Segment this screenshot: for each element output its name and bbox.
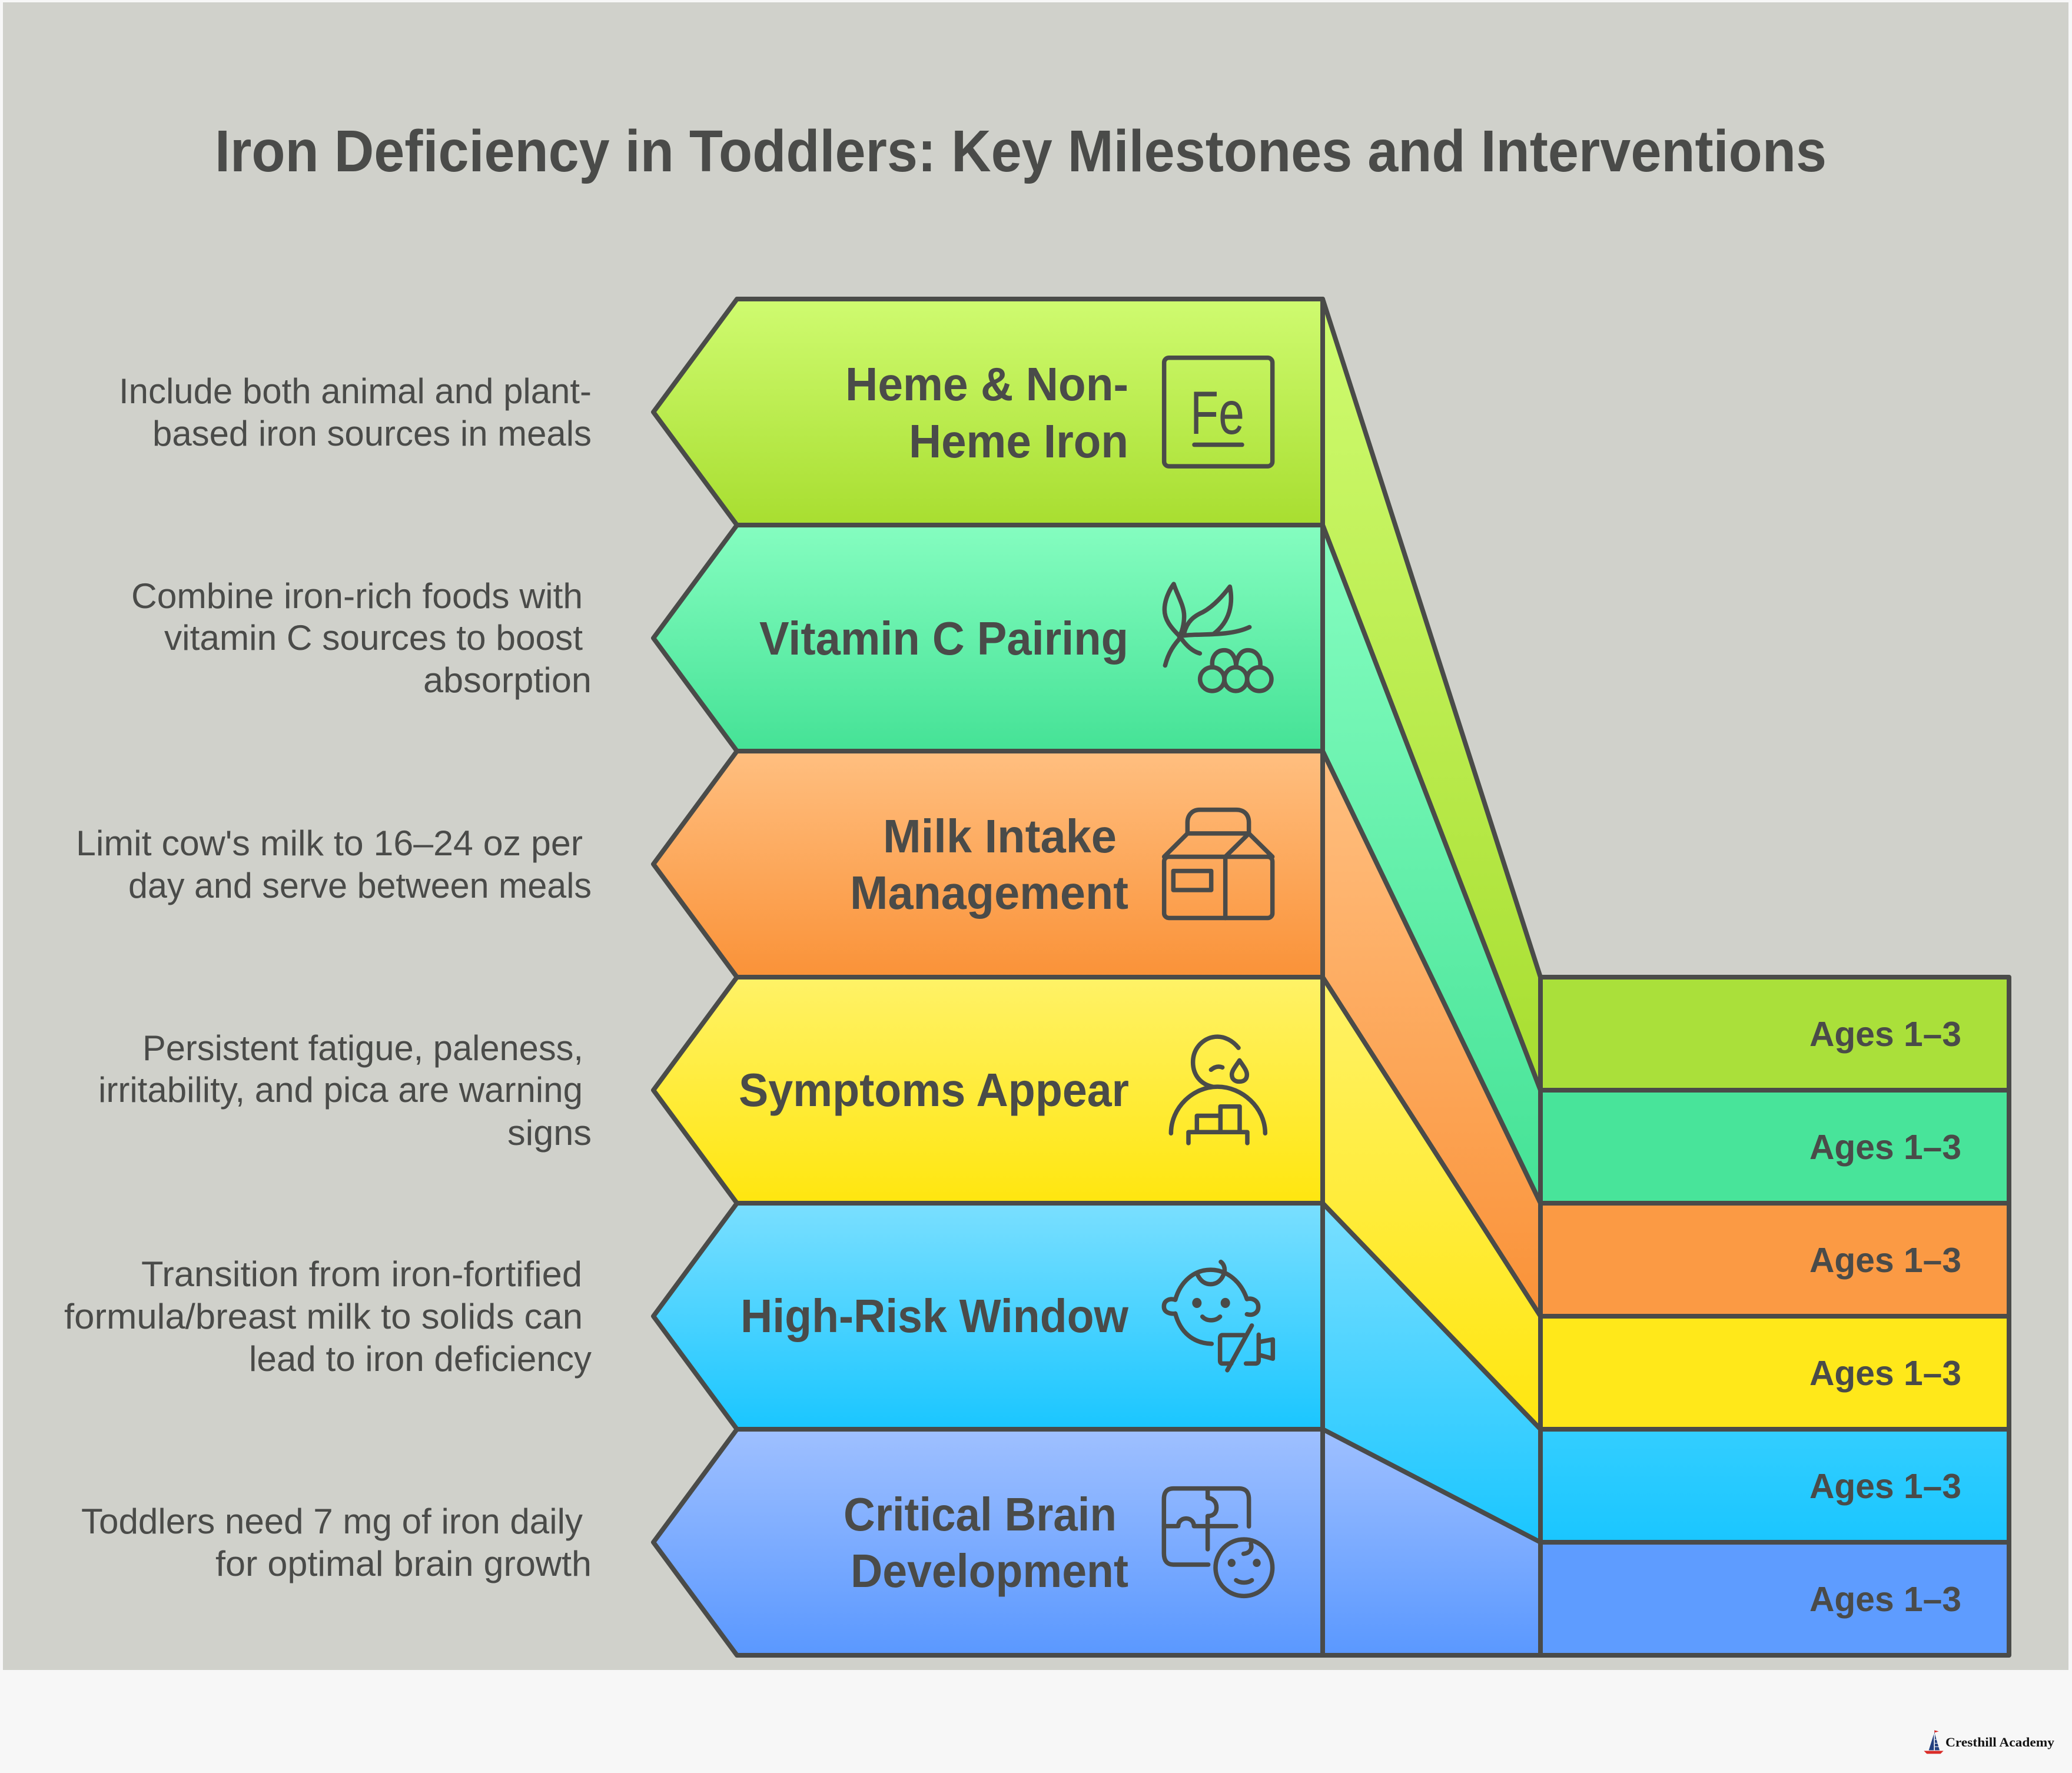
text block: Vitamin C description: [131, 576, 592, 700]
icon: puzzle and baby face: [1164, 1489, 1273, 1596]
panel: age box 6: Ages 1–3: [1809, 1580, 1961, 1619]
panel: age box 3: Ages 1–3: [1809, 1241, 1961, 1280]
heading: High-Risk Window: High-Risk Window: [741, 1290, 1129, 1342]
heading: Critical Brain Development: [844, 1488, 1128, 1597]
text block: Heme description: [119, 371, 592, 453]
text block: Vitamin C description: Combine iron-rich foods with: [131, 576, 583, 616]
heading: Heme and Non-Heme Iron: Heme & Non-: [845, 358, 1128, 410]
text block: High-risk description: [64, 1254, 592, 1379]
text block: Symptoms description: [98, 1028, 592, 1153]
icon: Fe element box: Fe: [1190, 379, 1244, 447]
text block: High-risk description: lead to iron deficiency: [249, 1339, 592, 1379]
icon: Fe element box: [1164, 358, 1273, 466]
text block: Milk description: [76, 824, 592, 905]
panel: age box 5: Ages 1–3: [1809, 1467, 1961, 1506]
heading: Milk Intake Management: Milk Intake: [883, 810, 1117, 862]
panel: age box 6: [1540, 1542, 2009, 1655]
heading: Critical Brain Development: Development: [851, 1545, 1128, 1597]
icon: milk carton: [1164, 810, 1273, 918]
logo: Cresthill Academy: [1924, 1730, 2054, 1754]
icon: leaves and berries: [1164, 584, 1271, 691]
connector band: teal: [1323, 525, 1540, 1203]
heading: Vitamin C Pairing: Vitamin C Pairing: [759, 612, 1128, 665]
heading: Symptoms Appear: Symptoms Appear: [739, 1064, 1129, 1116]
panel: Vitamin C Pairing arrow: [653, 525, 1323, 751]
icon: baby with muted camera: [1164, 1262, 1273, 1370]
text block: Symptoms description: Persistent fatigue, paleness,: [142, 1028, 583, 1068]
icon: sailboat: [1924, 1730, 1944, 1754]
connector band: blue: [1323, 1203, 1540, 1542]
text block: Vitamin C description: absorption: [423, 660, 592, 700]
title: Iron Deficiency in Toddlers: Key Milestones and Interventions: [215, 118, 1827, 184]
panel: Heme and Non-Heme Iron arrow: [653, 299, 1323, 525]
logo: Cresthill Academy: Cresthill Academy: [1945, 1735, 2054, 1749]
panel: age box 2: [1540, 1090, 2009, 1203]
text block: Brain description: [81, 1502, 592, 1583]
panel: age box 1: Ages 1–3: [1809, 1015, 1961, 1054]
panel: age box 4: Ages 1–3: [1809, 1354, 1961, 1393]
panel: age box 3: [1540, 1203, 2009, 1316]
panel: Symptoms Appear arrow: [653, 977, 1323, 1203]
text block: Milk description: Limit cow's milk to 16–24 oz per: [76, 824, 583, 863]
panel: age box 1: [1540, 977, 2009, 1090]
text block: Symptoms description: signs: [507, 1113, 592, 1153]
heading: Milk Intake Management: [850, 810, 1128, 919]
panel: age box 5: [1540, 1429, 2009, 1542]
text block: Heme description: based iron sources in meals: [152, 414, 592, 453]
text block: Brain description: for optimal brain growth: [215, 1544, 592, 1583]
connector band: orange: [1323, 751, 1540, 1316]
heading: Heme and Non-Heme Iron: [845, 358, 1128, 467]
text block: High-risk description: formula/breast milk to solids can: [64, 1297, 583, 1336]
panel: age box 2: Ages 1–3: [1809, 1128, 1961, 1167]
text block: Heme description: Include both animal and plant-: [119, 371, 592, 411]
icon: tired child with blocks: [1171, 1037, 1265, 1143]
heading: Heme and Non-Heme Iron: Heme Iron: [909, 415, 1128, 467]
panel: High-Risk Window arrow: [653, 1203, 1323, 1429]
panel: Milk Intake Management arrow: [653, 751, 1323, 977]
heading: Critical Brain Development: Critical Brain: [844, 1488, 1117, 1540]
text block: Brain description: Toddlers need 7 mg of iron daily: [81, 1502, 583, 1541]
text block: Milk description: day and serve between meals: [128, 866, 592, 905]
text block: High-risk description: Transition from iron-fortified: [141, 1254, 582, 1294]
text block: Vitamin C description: vitamin C sources to boost: [164, 618, 583, 658]
connector band: periwinkle: [1323, 1429, 1540, 1655]
connector band: green: [1323, 299, 1540, 1090]
panel: Critical Brain Development arrow: [653, 1429, 1323, 1655]
panel: age box 4: [1540, 1316, 2009, 1429]
heading: Milk Intake Management: Management: [850, 866, 1128, 919]
connector band: yellow: [1323, 977, 1540, 1429]
text block: Symptoms description: irritability, and pica are warning: [98, 1070, 583, 1110]
